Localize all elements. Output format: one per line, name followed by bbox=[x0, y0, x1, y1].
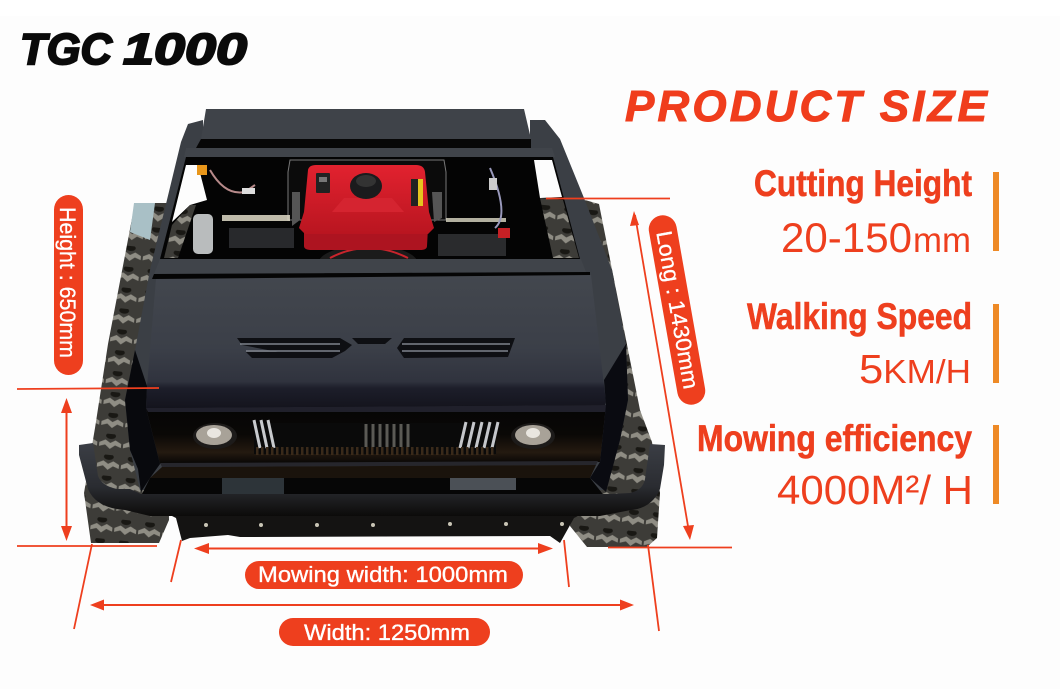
fuel tank and engine bbox=[288, 160, 446, 283]
hood panel bbox=[146, 275, 606, 408]
spec: cutting height: 20-150 bbox=[781, 214, 912, 261]
spec: cutting height: mm bbox=[913, 221, 971, 260]
overall width arrow bbox=[90, 600, 634, 610]
left glossy side piece bbox=[125, 350, 160, 492]
spec: mowing efficiency bbox=[697, 418, 999, 513]
mid frame bar bbox=[154, 259, 586, 274]
wiring and components bbox=[193, 165, 510, 256]
title: model name: TGC bbox=[20, 25, 113, 74]
right headlight bbox=[511, 423, 555, 449]
spec: walking speed bbox=[747, 296, 999, 392]
height arrow bbox=[61, 398, 72, 541]
spec: walking speed: Walking Speed bbox=[747, 296, 972, 337]
right rubber track bbox=[570, 200, 660, 547]
undercarriage bbox=[140, 478, 606, 498]
reference lines bbox=[17, 388, 159, 546]
length arrow bbox=[630, 211, 694, 540]
spec: cutting height: Cutting Height bbox=[754, 163, 972, 204]
left side opening bbox=[172, 165, 207, 222]
right glossy side piece bbox=[590, 344, 628, 492]
dimension: height bbox=[17, 195, 159, 546]
spec: mowing efficiency: 4000M²/ H bbox=[777, 467, 973, 513]
title: model name bbox=[20, 25, 248, 74]
machine illustration: tracked mower, front view bbox=[79, 109, 665, 547]
heading: product size: PRODUCT SIZE bbox=[625, 82, 989, 131]
dimension: mowing width bbox=[171, 540, 569, 589]
overall width pill label bbox=[279, 618, 490, 646]
spec: walking speed: 5KM/H bbox=[859, 346, 971, 392]
spec: mowing efficiency: Mowing efficiency bbox=[697, 418, 972, 459]
right side opening bbox=[534, 160, 562, 198]
top frame bar bbox=[184, 148, 555, 157]
top plate bbox=[201, 109, 531, 139]
front grille bbox=[254, 420, 498, 454]
dimension: length bbox=[546, 198, 732, 548]
side plate bbox=[130, 203, 155, 240]
mowing width arrow bbox=[194, 543, 553, 554]
fuel cap bbox=[350, 173, 382, 199]
front fascia bbox=[146, 405, 606, 464]
height pill label: Height : 650mm bbox=[55, 207, 80, 358]
length pill label: Long : 1430mm bbox=[651, 229, 704, 391]
engine bay bbox=[160, 157, 580, 259]
title: model name: 1000 bbox=[123, 25, 248, 74]
overall width pill label: Width: 1250mm bbox=[304, 620, 470, 645]
mower deck bbox=[172, 516, 578, 543]
front bumper bbox=[79, 443, 665, 516]
dimension: overall width bbox=[74, 544, 659, 646]
mowing width pill label: Mowing width: 1000mm bbox=[258, 562, 508, 587]
left headlight bbox=[193, 423, 237, 449]
frame outer arch bbox=[125, 120, 628, 490]
spec: cutting height bbox=[754, 163, 999, 261]
hood vents bbox=[237, 338, 515, 358]
left rubber track bbox=[84, 203, 190, 543]
length pill label bbox=[647, 213, 707, 407]
